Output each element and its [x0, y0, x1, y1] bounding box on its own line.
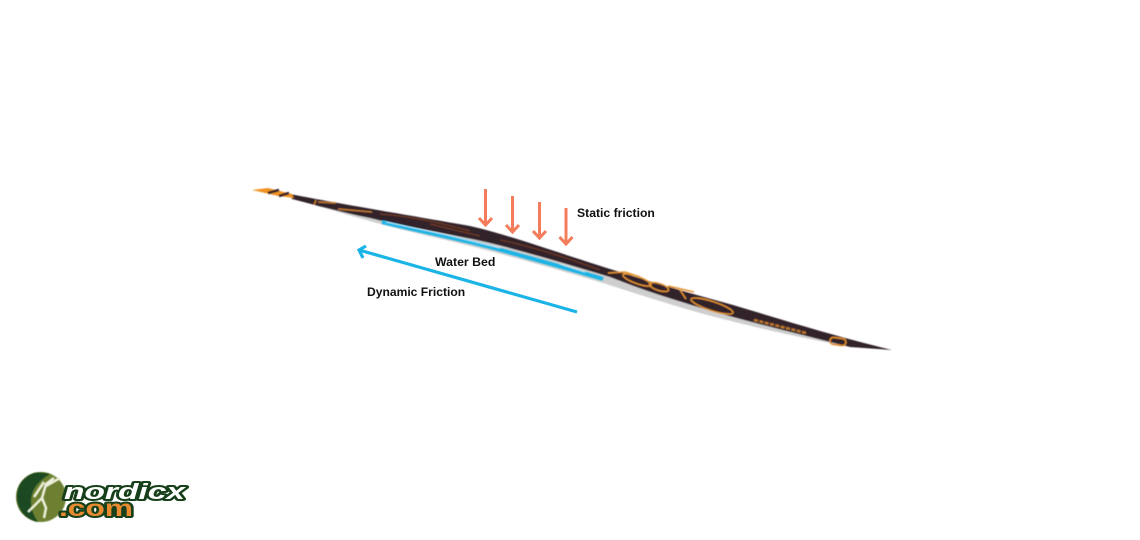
logo text: nordicx: nordicx: [64, 479, 186, 504]
arrow 4: [560, 208, 572, 244]
logo skier: [28, 478, 60, 518]
ski base edge: [300, 200, 860, 348]
ski tail tip: [252, 188, 294, 198]
water bed band: [382, 222, 603, 279]
static friction arrows: [479, 189, 572, 244]
tail logo marks: [314, 200, 372, 212]
arrow 2: [506, 196, 519, 232]
logo globe: [16, 472, 66, 522]
ski body: [290, 194, 892, 350]
front lettering: [608, 272, 734, 317]
arrow 3: [533, 202, 546, 238]
tail stripes: [268, 190, 289, 196]
water bed: [382, 222, 603, 279]
dynamic friction arrow: [359, 246, 577, 312]
water bed highlight: [386, 222, 585, 272]
label: dynamic friction: Dynamic Friction: [367, 285, 465, 299]
logo globe shading: [17, 473, 50, 522]
label: static friction: Static friction: [577, 206, 655, 220]
small model text: [754, 320, 806, 333]
label: water bed: Water Bed: [435, 255, 495, 269]
ski body grain: [380, 214, 600, 270]
tip logo: [830, 337, 846, 346]
logo: nordicx.com: [16, 472, 186, 522]
logo text: .com: .com: [59, 495, 133, 521]
arrow 1: [479, 189, 492, 225]
ski: [252, 188, 892, 350]
